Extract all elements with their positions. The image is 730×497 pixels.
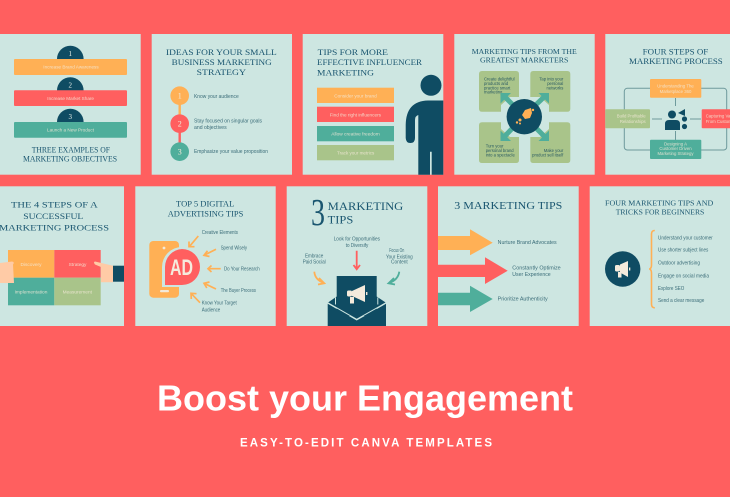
tip card text: products and <box>484 81 509 86</box>
objective 3: Launch a New Product <box>47 127 95 133</box>
tips list: Send a clear message <box>658 298 704 304</box>
tip labels: Creative Elements <box>202 230 238 236</box>
tip bars: Track your metrics <box>337 151 375 157</box>
four-step grid: Strategy <box>69 262 87 268</box>
icon: megaphone <box>347 285 367 304</box>
tip bars: Consider your brand <box>334 93 377 99</box>
heading: MARKETING PROCESS <box>0 223 109 233</box>
tip labels: Prioritize Authenticity <box>498 297 548 303</box>
icon: standing person <box>406 75 443 175</box>
green tip cards <box>479 71 570 163</box>
tip card text: practice smart <box>484 86 511 90</box>
heading: 3 <box>311 192 325 234</box>
icon: AD speech bubble <box>162 247 202 287</box>
icon: envelope <box>328 276 386 326</box>
tip labels: to Diversify <box>346 243 369 249</box>
heading: STRATEGY <box>197 67 247 77</box>
tip labels: Paid Social <box>303 259 326 265</box>
tip card text: product sell itself <box>532 152 564 157</box>
objective 1: Increase Brand Awareness <box>43 65 99 71</box>
tip bars: Allow creative freedom <box>331 132 380 138</box>
heading: TIPS <box>328 214 353 226</box>
heading: BUSINESS MARKETING <box>172 57 272 67</box>
heading: MARKETING <box>317 68 375 78</box>
heading: TOP 5 DIGITAL <box>176 199 234 209</box>
heading <box>166 47 277 77</box>
four-step grid: Discovery <box>20 262 42 268</box>
arrows to tips <box>189 236 221 303</box>
heading: MARKETING PROCESS <box>629 56 723 66</box>
panel: marketing tips from the greatest marketers <box>454 34 595 175</box>
heading: TRICKS FOR BEGINNERS <box>616 207 704 216</box>
panel: top 5 digital advertising tips <box>135 186 276 326</box>
tip card text: Tap into your <box>539 77 564 82</box>
tip card text: personal <box>547 81 563 86</box>
red arrow <box>438 257 508 284</box>
process boxes: Relationships <box>620 119 646 124</box>
four-step grid <box>8 250 101 305</box>
heading: THREE EXAMPLES OF <box>32 145 111 154</box>
process boxes: Understanding The <box>657 84 694 89</box>
tip labels: Spend Wisely <box>221 246 247 252</box>
tip card text: into a spectacle <box>486 152 515 157</box>
heading: FOUR MARKETING TIPS AND <box>605 199 714 208</box>
tip card text: Turn your <box>486 144 504 149</box>
tip card text <box>484 77 564 157</box>
heading: TIPS FOR MORE <box>318 47 388 57</box>
curved arrows <box>314 251 399 284</box>
tip bars: Find the right influencers <box>330 113 382 119</box>
timeline text <box>194 94 268 155</box>
tip card text: Create delightful <box>484 77 515 82</box>
tip labels <box>498 240 561 303</box>
heading <box>629 46 723 66</box>
objective 3 <box>14 109 127 138</box>
heading <box>311 192 403 234</box>
tips list: Use shorter subject lines <box>658 248 709 254</box>
panel: three examples of marketing objectives <box>0 34 141 175</box>
tip bars <box>317 88 394 160</box>
tips list: Engage on social media <box>658 273 709 279</box>
objective 2: Increase Market Share <box>47 96 94 102</box>
tip labels: Do Your Research <box>224 266 260 272</box>
panel: four marketing tips and tricks for beginners <box>590 186 730 326</box>
icon: megaphone badge <box>605 251 640 287</box>
heading <box>168 199 243 219</box>
subtitle: EASY-TO-EDIT CANVA TEMPLATES <box>240 438 492 450</box>
tip labels <box>303 237 413 266</box>
heading: 3 MARKETING TIPS <box>454 201 562 212</box>
heading: THE 4 STEPS OF A <box>11 200 98 210</box>
objective 2: 2 <box>69 82 73 90</box>
icon: hands holding grid <box>0 262 124 283</box>
main title: Boost your Engagement <box>157 378 573 419</box>
numbered timeline: 2 <box>178 120 182 128</box>
tips list: Understand your customer <box>658 235 713 241</box>
heading <box>0 200 109 233</box>
four-step grid: Measurement <box>63 289 93 295</box>
tip labels <box>202 230 260 313</box>
tip labels: User Experience <box>512 272 551 278</box>
four-step grid: Implementation <box>15 289 48 295</box>
tip labels: Your Existing <box>386 254 413 260</box>
tip card text: networks <box>547 86 563 90</box>
teal arrow <box>438 286 493 312</box>
tip labels: Know Your Target <box>202 301 237 307</box>
tip labels: Content <box>391 260 408 266</box>
icon: center target <box>507 99 542 134</box>
tips list <box>658 235 713 304</box>
tip labels: Audience <box>202 307 220 313</box>
process boxes: Designing A <box>664 141 687 146</box>
heading: EFFECTIVE INFLUENCER <box>317 57 422 67</box>
heading: GREATEST MARKETERS <box>480 56 568 65</box>
process boxes: Marketplace 360 <box>660 89 692 94</box>
tip labels: Constantly Optimize <box>512 265 561 271</box>
panel: tips for more effective influencer marketing <box>303 34 443 175</box>
objective 2 <box>14 77 127 106</box>
tip card text: personal brand <box>486 148 514 153</box>
numbered timeline: 1 <box>178 92 182 100</box>
tip labels: Nurture Brand Advocates <box>498 240 557 246</box>
timeline text: Emphasize your value proposition <box>194 149 268 155</box>
tip labels: Focus On <box>389 248 404 254</box>
heading: MARKETING TIPS FROM THE <box>472 47 577 56</box>
icon: marketer with megaphone <box>665 109 687 130</box>
numbered timeline: 3 <box>178 148 182 156</box>
panel: ideas for small business marketing strategy <box>152 34 292 175</box>
heading <box>317 47 422 78</box>
heading <box>605 199 714 216</box>
tips list: Outdoor advertising <box>658 260 700 266</box>
panel: 3 marketing tips with envelope <box>287 186 427 326</box>
heading: FOUR STEPS OF <box>643 46 708 56</box>
timeline text: Know your audience <box>194 94 239 100</box>
tip labels: The Buyer Process <box>221 288 256 294</box>
orange arrow <box>438 229 493 255</box>
tip card text: marketing <box>484 90 503 95</box>
heading <box>23 145 117 163</box>
heading: IDEAS FOR YOUR SMALL <box>166 47 277 57</box>
heading: MARKETING <box>328 201 403 213</box>
process boxes <box>605 79 730 159</box>
process boxes: Marketing Strategy <box>657 151 694 156</box>
tip card text: Make your <box>544 148 564 153</box>
process boxes: Build Profitable <box>617 114 646 118</box>
teal arrows <box>500 93 549 141</box>
heading: SUCCESSFUL <box>23 211 83 221</box>
heading <box>472 47 577 65</box>
tip labels: Look for Opportunities <box>334 237 380 243</box>
objective 3: 3 <box>69 113 73 121</box>
objective 1: 1 <box>69 50 73 58</box>
timeline text: Stay focused on singular goals <box>194 119 262 125</box>
orange brace <box>649 230 655 308</box>
timeline text: and objectives <box>194 125 227 131</box>
heading: MARKETING OBJECTIVES <box>23 154 117 163</box>
panel: four steps of marketing process <box>605 34 730 175</box>
process boxes: Customer Driven <box>659 146 692 151</box>
icon: AD speech bubble: AD <box>170 255 193 280</box>
panel: 3 marketing tips with arrows <box>438 186 579 326</box>
objective 1 <box>14 46 127 75</box>
icon: phone <box>149 241 179 298</box>
panel: the 4 steps of a successful marketing process <box>0 186 124 326</box>
heading: ADVERTISING TIPS <box>168 209 243 219</box>
process loop lines <box>624 88 727 150</box>
tips list: Explore SEO <box>658 286 684 292</box>
tip labels: Embrace <box>305 254 323 260</box>
numbered timeline <box>170 86 189 161</box>
